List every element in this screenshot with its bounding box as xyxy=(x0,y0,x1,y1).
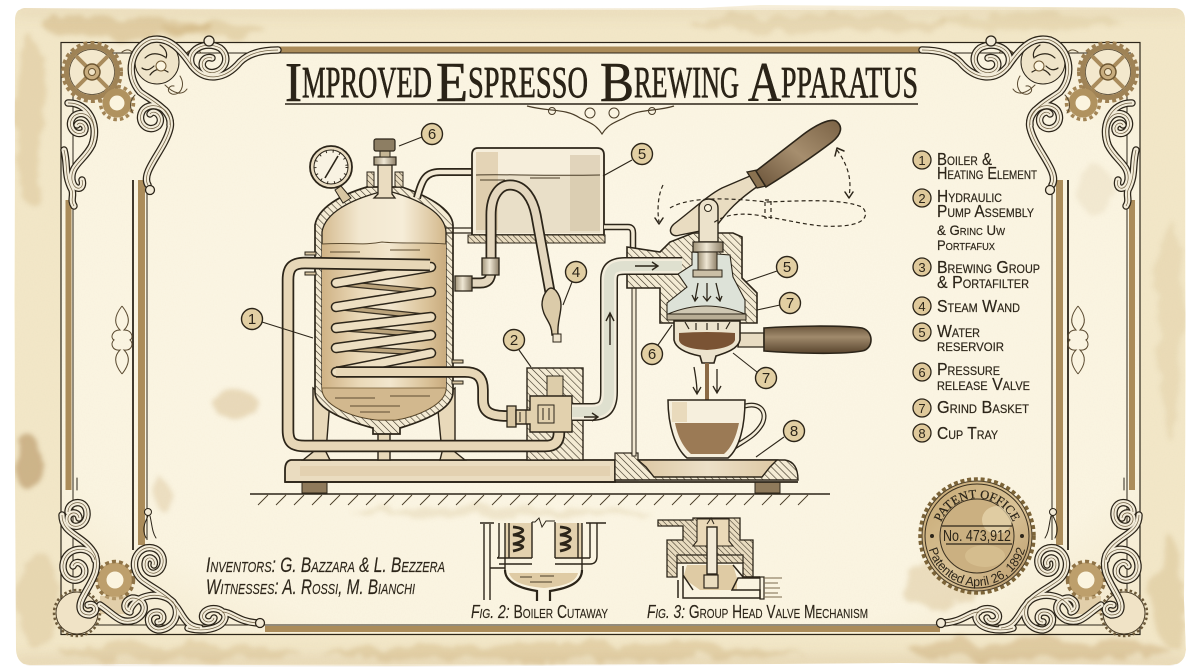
inventors and witnesses: Inventors: G. Bazzara & L. Bezzera xyxy=(206,554,445,577)
ground line xyxy=(250,494,830,505)
callout 4 steam wand: 4 xyxy=(572,264,580,281)
group head chamber xyxy=(667,252,746,320)
legend item 1: Boiler & xyxy=(937,149,992,169)
title: MPROVED xyxy=(302,58,432,107)
legend item 2: Portfafux xyxy=(937,237,995,253)
dashed lever motion indicator xyxy=(658,150,866,226)
callout 5 group xyxy=(776,256,798,278)
lever handle xyxy=(747,120,841,188)
legend item 7: 7 xyxy=(918,401,926,416)
callout 6 lower: 6 xyxy=(648,346,656,363)
legend item 2: Hydraulic xyxy=(937,186,1002,206)
legend item 3: Brewing Group xyxy=(937,257,1040,277)
legend item 5: Water xyxy=(937,321,980,341)
legend item 5: reservoir xyxy=(937,335,1004,355)
callout leader lines xyxy=(262,137,784,457)
callout 4 steam wand xyxy=(566,262,586,282)
callout 2 pump xyxy=(504,330,524,350)
callout 5 reservoir: 5 xyxy=(638,146,646,163)
legend item 6: 6 xyxy=(918,365,926,380)
pump housing xyxy=(527,368,583,460)
legend item 1: Heating Element xyxy=(937,163,1038,183)
legend xyxy=(913,149,1040,443)
legend item 6: release Valve xyxy=(937,374,1030,394)
corner ornament top-left xyxy=(63,36,278,206)
callout 5 group: 5 xyxy=(783,259,791,276)
callout 8 tray: 8 xyxy=(790,423,798,440)
callout 1 boiler: 1 xyxy=(248,311,256,328)
title: E xyxy=(436,52,468,114)
legend item 8: 8 xyxy=(918,426,926,441)
callout 6 valve: 6 xyxy=(428,126,436,143)
title: B xyxy=(600,52,634,114)
boiler vessel xyxy=(305,139,463,434)
corner ornament bottom-right xyxy=(936,478,1147,636)
title: SPRESSO xyxy=(468,58,588,107)
figure 3 caption: Fig. 3: Group Head Valve Mechanism xyxy=(647,602,868,622)
patent office seal: No. 473,912 xyxy=(943,528,1011,545)
espresso stream and arrows xyxy=(693,363,721,423)
legend item 8: Cup Tray xyxy=(937,423,998,443)
legend item 3 xyxy=(913,257,1040,292)
legend item 5: 5 xyxy=(918,325,926,340)
side flourish right xyxy=(1068,306,1088,374)
legend item 3: & Portafilter xyxy=(937,272,1029,292)
column xyxy=(632,288,636,456)
legend item 4: Steam Wand xyxy=(937,296,1020,316)
legend item 2: 2 xyxy=(918,191,926,206)
motion arrowheads xyxy=(655,148,853,224)
inventors and witnesses: Witnesses: A. Rossi, M. Bianchi xyxy=(206,576,415,599)
title: PPARATUS xyxy=(781,58,918,107)
title xyxy=(285,52,918,114)
patent office seal: PATENT OFFICE xyxy=(934,490,1020,522)
legend item 6: Pressure xyxy=(937,359,1000,379)
delivery pipe xyxy=(572,262,682,421)
figure 3 group head valve xyxy=(658,518,782,599)
side flourish left xyxy=(112,306,132,374)
callout 8 tray xyxy=(784,420,804,442)
cup xyxy=(668,400,764,458)
patent office seal xyxy=(918,477,1036,595)
title: I xyxy=(285,52,302,114)
legend item 4: 4 xyxy=(918,299,926,314)
legend item 1 xyxy=(913,149,1038,183)
callout 6 lower xyxy=(642,344,662,364)
heating coil xyxy=(336,267,431,372)
title: REWING xyxy=(634,58,739,107)
return pipe around boiler xyxy=(288,263,559,446)
group head body xyxy=(627,233,757,323)
portafilter xyxy=(674,321,871,363)
figure 2 caption: Fig. 2: Boiler Cutaway xyxy=(471,602,608,622)
inventors and witnesses xyxy=(206,554,445,599)
legend item 3: 3 xyxy=(918,260,926,275)
cup tray xyxy=(638,460,777,477)
callout 7 upper: 7 xyxy=(786,295,794,312)
boiler legs xyxy=(303,388,465,460)
base plate and feet xyxy=(285,453,798,493)
title: A xyxy=(748,52,781,114)
figure 2 boiler cutaway xyxy=(480,518,606,601)
legend item 7: Grind Basket xyxy=(937,397,1030,417)
callout 7 lower xyxy=(756,368,776,388)
callout 6 valve xyxy=(422,124,442,144)
water reservoir xyxy=(417,148,633,248)
callout 5 reservoir xyxy=(632,144,652,164)
legend item 6 xyxy=(913,359,1030,394)
legend item 2: Pump Assembly xyxy=(937,201,1034,221)
legend item 8 xyxy=(913,423,998,443)
steam wand xyxy=(455,185,561,342)
hydraulic pump body xyxy=(507,376,572,432)
title rule and ornament xyxy=(285,104,918,134)
legend item 2: & Grinc Uw xyxy=(937,222,1006,238)
callout 7 upper xyxy=(780,292,800,314)
main apparatus diagram xyxy=(242,120,871,505)
neck and valve xyxy=(367,139,403,198)
legend item 1: 1 xyxy=(918,153,926,168)
corner ornament top-right xyxy=(922,36,1137,206)
callout 1 boiler xyxy=(242,308,262,330)
callout 2 pump: 2 xyxy=(510,332,518,349)
corner ornament bottom-left xyxy=(54,478,264,636)
pressure gauge xyxy=(310,146,352,203)
callout 7 lower: 7 xyxy=(762,370,770,387)
legend item 2 xyxy=(913,186,1034,253)
legend item 5 xyxy=(913,321,1004,355)
piston and lever arm xyxy=(670,176,758,277)
patent office seal: Patented April 26, 1892 xyxy=(929,547,1025,589)
